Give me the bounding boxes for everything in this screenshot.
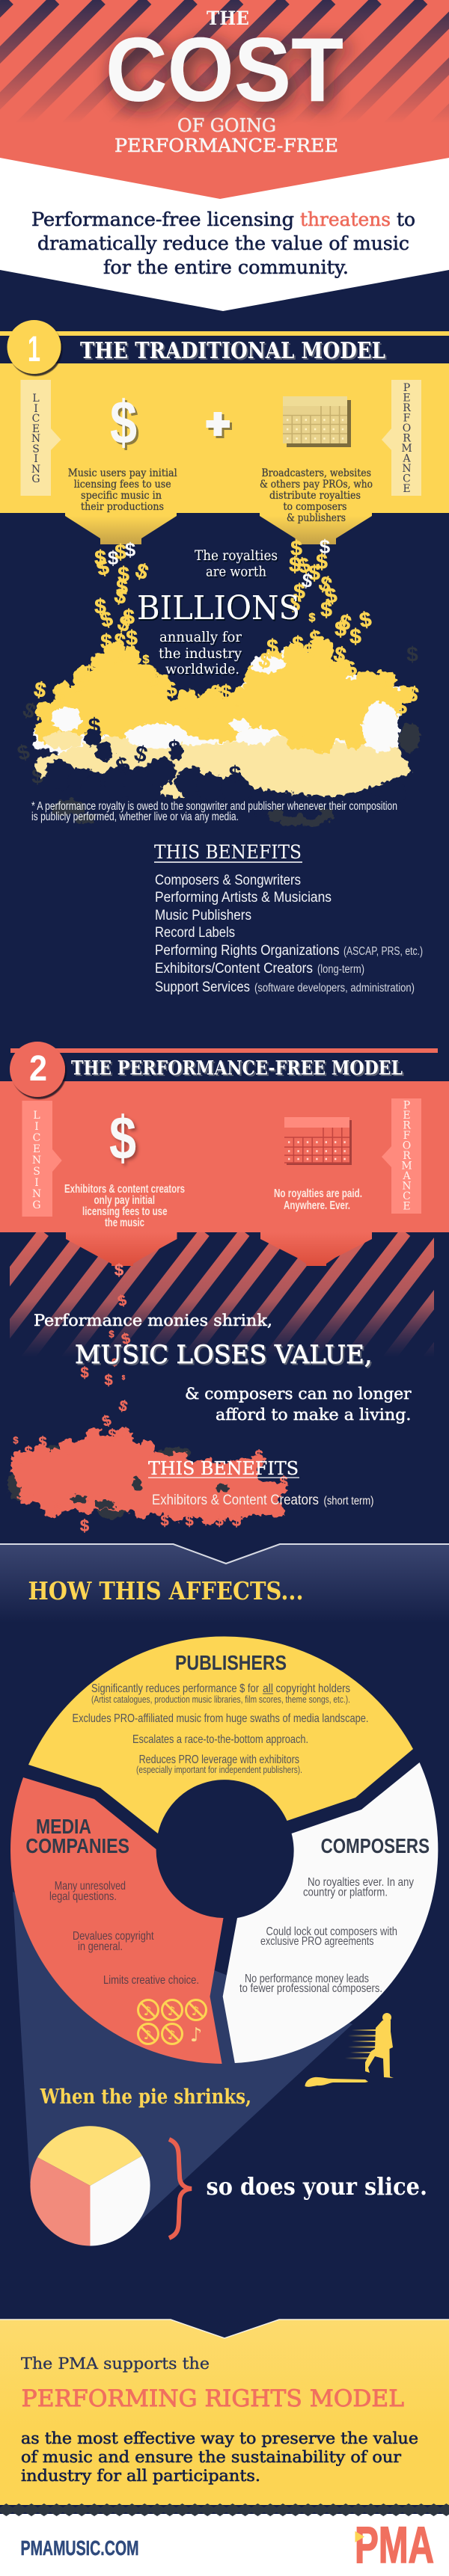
dollar cloud: shrunken: $ [114,1261,123,1279]
number badge 1: 1 [28,330,40,369]
slice: composers: No performance money leads [245,1973,369,1985]
slice: publishers: Significantly reduces performance $ for [91,1682,260,1695]
text: when the pie shrinks: When the pie shrinks, [40,2085,251,2109]
text: licensing explanation: Music users pay initial [68,467,177,479]
dollar cloud: billions: $ [19,698,40,724]
dollar cloud: billions: $ [132,559,152,585]
dollar cloud: billions: $ [143,654,150,666]
tab: licensing (2): E [33,1143,40,1155]
list: beneficiaries: Performing Artists & Musicians [155,890,332,906]
dollar cloud: billions: $ [83,661,95,684]
dollar cloud: billions: $ [94,594,106,618]
panel: conclusion [0,2320,449,2505]
tab: licensing (2): N [32,1155,41,1166]
text: the royalties are worth billions: BILLIONS [137,589,300,627]
dollar cloud: shrunken: $ [185,1513,194,1529]
dollar cloud: billions: $ [15,740,32,765]
dollar cloud: billions: $ [287,591,304,616]
heading: this benefits: THIS BENEFITS [154,841,302,863]
tab: licensing (2): C [33,1132,40,1144]
text: performance monies shrink: afford to make a living. [216,1406,412,1424]
dollar cloud: shrunken: $ [122,1374,126,1381]
slice: composers [223,1762,438,2063]
dollar cloud: billions: $ [220,680,232,704]
dollar cloud: shrunken: $ [215,1513,224,1529]
list: beneficiaries: (software developers, administration) [254,982,415,995]
tab: performance: N [402,463,412,475]
slice: composers: exclusive PRO agreements [260,1935,374,1948]
zigzag border [0,2503,449,2516]
dollar cloud: billions: $ [300,568,315,592]
dollar cloud: shrunken [7,1261,288,1535]
band: how this affects background [0,1544,449,1623]
dollar cloud: shrunken: $ [100,1413,114,1430]
dollar cloud: billions: $ [52,689,67,713]
dollar cloud: shrunken: $ [120,1330,132,1348]
icon: abandoned guitar [305,2077,368,2087]
intro statement: for the entire community. [103,256,349,278]
text: no royalties: Anywhere. Ever. [284,1199,350,1212]
text: performance monies shrink [34,1312,412,1424]
dollar cloud: billions: $ [114,540,126,563]
icon: calendar [283,396,351,447]
tab: licensing: I [34,453,38,465]
text: performance monies shrink: Performance monies shrink, [34,1312,272,1330]
slice: publishers: (especially important for independent publishers). [136,1765,302,1775]
text: no royalties: No royalties are paid. [274,1187,362,1200]
dollar cloud: billions: $ [320,597,332,621]
text: performance-free licensing explanation: Exhibitors & content creators [64,1183,185,1196]
tab: performance (2): C [403,1190,411,1202]
panel: performance-free model [0,1081,449,1266]
projection beam [13,1892,352,2223]
tab: performance: A [402,453,411,465]
dollar cloud: shrunken: $ [104,1372,113,1389]
list: short-term beneficiaries: (short term) [323,1495,374,1507]
icons: crossed-out music notes: ♪ [168,2028,175,2043]
tab: licensing: I [34,403,38,415]
list: short-term beneficiaries: Exhibitors & Content Creators [152,1493,319,1508]
dollar cloud: billions: $ [316,571,335,597]
tab: performance [382,380,421,496]
text: no royalties [274,1187,362,1212]
brace [169,2139,192,2238]
dollar cloud: billions: $ [88,714,101,739]
section 1 rule [0,331,449,336]
title: THE [207,7,249,29]
dollar cloud: shrunken: $ [254,1448,263,1464]
tab: performance (2): M [401,1161,412,1172]
intro statement: Performance-free licensing [31,209,294,230]
dollar cloud: billions: $ [229,762,242,787]
icons: crossed-out music notes: ♪ [144,2004,151,2019]
dollar cloud: billions: $ [290,536,302,559]
tab: performance: M [401,443,412,455]
dollar cloud: billions: $ [94,546,106,569]
dollar cloud: billions: $ [293,580,305,603]
tab: licensing (2): N [32,1188,41,1200]
dollar cloud: billions: $ [168,737,181,761]
dollar cloud: billions: $ [111,628,128,654]
tab: performance (2): E [403,1110,411,1122]
dollar cloud: billions: $ [100,630,112,653]
list: beneficiaries: Exhibitors/Content Creators [155,961,313,977]
dollar cloud: billions: $ [372,760,384,784]
icon: calendar (2) [284,1117,350,1163]
intro statement: threatens [300,209,391,230]
text: performance explanation: distribute royalties [269,490,361,502]
dollar cloud: billions: $ [69,671,86,697]
dollar cloud: billions: $ [395,695,407,718]
background stripes: section 2 [10,1232,434,1352]
dollar cloud: billions: $ [308,561,320,584]
tab: licensing (2): S [33,1166,40,1178]
icon: man walking away [345,2013,394,2078]
dollar cloud: billions: $ [303,639,315,663]
footnote: is publicly performed, whether live or via any media. [31,811,239,823]
dollar cloud: billions: $ [40,703,52,726]
slice: publishers: all [263,1682,273,1695]
tab: licensing (2): I [34,1121,39,1133]
icon: dollar: $ [110,389,137,457]
text: performance-free licensing explanation: the music [105,1217,144,1229]
text: so does your slice: so does your slice. [207,2172,427,2201]
tab: performance (2): A [402,1170,411,1182]
list: beneficiaries: Performing Rights Organizations [155,943,340,959]
dollar cloud: billions: $ [112,583,129,609]
dollar cloud: billions: $ [406,642,418,665]
text: performance monies shrink: MUSIC LOSES VALUE, [75,1340,373,1370]
slice: publishers: Excludes PRO-affiliated music from huge swaths of media landscape. [72,1712,368,1725]
footer background [0,2514,449,2576]
list: beneficiaries: Music Publishers [155,908,251,923]
text: licensing explanation: their productions [81,501,164,513]
text: the royalties are worth billions: worldwide. [165,661,239,677]
tab: licensing (2): G [32,1199,41,1211]
dollar cloud: billions: $ [323,583,339,608]
intro statement: to [397,209,415,230]
dollar cloud: billions: $ [308,625,325,651]
tab: performance: R [403,432,411,444]
dollar cloud: shrunken: $ [108,1427,117,1443]
text: licensing explanation: specific music in [81,490,162,502]
text: performance explanation: to composers [283,501,347,513]
dollar cloud: billions: $ [289,553,301,576]
intro statement: dramatically reduce the value of music [37,233,409,254]
text: the royalties are worth billions: are worth [206,564,266,580]
tab: performance: O [403,422,411,434]
title [106,7,343,156]
dollar cloud: billions: $ [126,626,138,649]
slice: composers: to fewer professional composers. [239,1982,382,1995]
conclusion text: of music and ensure the sustainability of our [21,2448,402,2466]
tab: performance: E [403,483,411,495]
dollar cloud: billions: $ [31,764,43,787]
tab: licensing: E [32,423,40,435]
slice: publishers: Escalates a race-to-the-bottom approach. [132,1733,308,1746]
tab: performance (2) [382,1098,421,1214]
slice: publishers: PUBLISHERS [175,1651,287,1674]
dollar cloud: shrunken: $ [80,1365,89,1381]
dollar cloud: billions [15,535,421,826]
tab: performance: R [403,402,411,414]
slice: publishers [28,1636,413,1833]
text: performance explanation: & publishers [287,512,346,524]
slice: media companies: Devalues copyright [73,1930,154,1943]
tab: licensing (2) [22,1101,62,1217]
tab: performance (2): O [403,1140,411,1152]
tab: licensing (2): L [33,1110,40,1122]
dollar cloud: billions: $ [404,681,421,707]
tab: performance (2): F [403,1130,411,1142]
slice: media companies: MEDIA [36,1815,91,1838]
tab: licensing: N [31,464,40,476]
tab: performance (2): P [403,1100,410,1112]
text: licensing explanation: licensing fees to use [74,479,171,491]
slice: media companies: COMPANIES [25,1834,129,1857]
text: the royalties are worth billions: the industry [159,645,242,662]
icon: dollar (2): $ [109,1104,136,1172]
dollar cloud: billions: $ [342,656,359,681]
dollar cloud: billions: $ [145,665,162,691]
slice: media companies: legal questions. [49,1890,117,1903]
tab: licensing: S [32,443,40,455]
slice: media companies: Limits creative choice. [103,1974,199,1987]
conclusion text: The PMA supports the [21,2355,210,2373]
list: beneficiaries: Composers & Songwriters [155,873,301,888]
heading: the traditional model: THE TRADITIONAL MODEL [80,338,385,364]
tab: performance (2): R [403,1150,411,1162]
title: PERFORMANCE-FREE [114,135,338,156]
dollar cloud: billions: $ [296,553,313,578]
text: performance explanation [260,467,373,524]
list: beneficiaries: Support Services [155,980,250,995]
dollar cloud: billions: $ [123,605,135,628]
text: licensing explanation [68,467,177,513]
dollar cloud: shrunken: $ [109,1328,114,1339]
icons: crossed-out music notes: ♪ [192,2004,199,2019]
conclusion text [21,2355,418,2485]
slice: media companies [10,1777,223,2064]
conclusion text: industry for all participants. [21,2467,260,2485]
dollar cloud: shrunken: $ [121,1425,130,1442]
dollar cloud: billions: $ [113,752,133,779]
icons: crossed-out music notes: ♪ [168,2004,175,2019]
dollar cloud: shrunken: $ [13,1434,19,1445]
slice: media companies: Many unresolved [55,1880,126,1893]
pie chart [10,1636,438,2064]
dollar cloud: shrunken: $ [279,1474,288,1490]
dollar cloud: billions: $ [125,538,136,561]
dollar cloud: billions: $ [292,632,304,655]
slice: publishers: copyright holders [275,1682,350,1695]
dollar cloud: billions: $ [32,677,48,702]
tab: performance: P [403,382,410,394]
dollar cloud: billions: $ [94,555,112,580]
panel: traditional model [0,363,449,544]
dollar cloud: billions: $ [309,612,316,624]
title: OF GOING [177,115,276,136]
icons: crossed-out music notes [138,1999,207,2047]
dollar cloud: shrunken: $ [53,1501,62,1518]
dollar cloud: shrunken: $ [38,1434,47,1451]
dollar cloud: billions: $ [108,547,119,569]
tab: licensing (2): I [34,1177,39,1189]
dollar cloud: billions: $ [337,609,354,635]
dollar cloud: shrunken: $ [117,1398,129,1415]
slice: publishers: (Artist catalogues, production music libraries, film scores, theme songs, etc.). [91,1694,350,1705]
dollar cloud: billions: $ [114,611,134,637]
number badge 1 [7,320,61,374]
heading: how this affects: HOW THIS AFFECTS... [28,1576,304,1605]
tab: performance: E [403,392,411,404]
tab: licensing [21,380,61,496]
dollar cloud: shrunken: $ [232,1511,241,1530]
number badge 2 [10,1042,65,1097]
list: beneficiaries [155,873,423,995]
dollar cloud: billions: $ [257,648,274,673]
dollar cloud: shrunken: $ [24,1444,33,1460]
dollar cloud: billions: $ [320,535,331,558]
text: performance-free licensing explanation: only pay initial [94,1194,155,1207]
text: performance explanation: Broadcasters, websites [262,467,371,479]
slice: publishers: Reduces PRO leverage with exhibitors [139,1753,299,1766]
tab: performance (2): N [402,1181,412,1193]
list: beneficiaries: Record Labels [155,925,235,941]
intro band background [0,0,449,311]
number badge 2: 2 [29,1049,47,1089]
slice: composers: Could lock out composers with [266,1925,397,1938]
intro statement [31,209,415,278]
text: performance monies shrink: & composers can no longer [185,1385,412,1403]
list: beneficiaries: (long-term) [317,963,364,976]
dollar cloud: shrunken: $ [201,1511,210,1528]
heading: this benefits (2): THIS BENEFITS [148,1458,299,1479]
header banner [0,0,449,199]
slice: composers: country or platform. [303,1886,388,1899]
tab: licensing: G [31,473,40,485]
dollar cloud: billions: $ [316,550,328,573]
dollar cloud: billions: $ [116,575,128,598]
tab: licensing: N [31,433,40,445]
dollar cloud: billions: $ [117,562,129,585]
dollar cloud: shrunken: $ [112,1356,117,1368]
section 2 rule [10,1048,438,1053]
icon: plus [207,412,230,436]
icons: crossed-out music notes: ♪ [144,2028,151,2043]
dollar cloud: shrunken: $ [80,1516,89,1535]
slice: composers: No royalties ever. In any [308,1876,414,1889]
text: performance-free licensing explanation: licensing fees to use [82,1205,168,1218]
dollar cloud: billions: $ [266,635,278,658]
small pie [30,2126,150,2246]
footnote [31,800,397,823]
tab: performance (2): R [403,1120,411,1132]
dollar cloud: billions: $ [163,677,179,701]
text: performance-free licensing explanation [64,1183,185,1229]
dollar cloud: billions: $ [132,741,150,768]
dollar cloud: shrunken: $ [116,1292,128,1310]
tab: licensing: L [32,393,40,405]
dollar cloud: billions: $ [335,617,346,640]
list: beneficiaries: (ASCAP, PRS, etc.) [343,945,423,958]
dollar cloud: billions: $ [332,642,349,667]
text: the royalties are worth billions: annually for [159,629,242,645]
dollar cloud: shrunken: $ [160,1513,169,1529]
tab: performance (2): E [403,1201,411,1213]
dollar cloud: billions: $ [379,668,391,692]
dollar cloud: billions: $ [98,606,115,632]
text: the royalties are worth billions [137,547,300,677]
text: performance explanation: & others pay PROs, who [260,479,373,491]
tab: licensing: C [32,413,40,425]
dollar cloud: billions: $ [206,680,225,706]
icons: crossed-out music notes: ♪ [190,2024,202,2047]
title: COST [106,19,343,120]
conclusion text: PERFORMING RIGHTS MODEL [22,2385,404,2412]
dollar cloud: billions: $ [358,607,373,632]
footer url: PMAMUSIC.COM [21,2536,139,2560]
dollar cloud: billions: $ [349,624,361,648]
tab: performance: C [403,473,411,485]
dollar cloud: billions: $ [406,719,418,743]
tab: performance: F [403,413,411,425]
conclusion text: as the most effective way to preserve the value [21,2429,418,2447]
text: the royalties are worth billions: The royalties [195,547,278,564]
slice: media companies: in general. [78,1940,123,1953]
